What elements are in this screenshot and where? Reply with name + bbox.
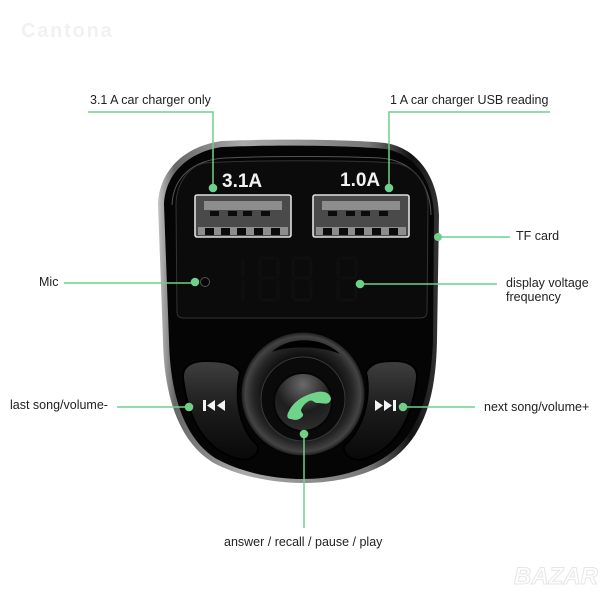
callout: 1 A car charger USB reading: 1 A car charger USB reading	[390, 93, 548, 107]
middle ring	[261, 357, 345, 441]
label: 1.0A: 1.0A	[340, 170, 380, 191]
outer ring	[241, 332, 365, 456]
phone icon	[287, 392, 331, 420]
display panel	[176, 161, 428, 318]
callout: display voltage frequency: frequency	[506, 290, 562, 304]
callout: 3.1 A car charger only: 3.1 A car charger only	[90, 93, 212, 107]
mic hole	[200, 278, 210, 286]
right button	[344, 361, 417, 460]
watermark: Bazar: BAZAR	[514, 563, 599, 590]
callout: TF card: TF card	[516, 229, 559, 243]
callout: 3.1 A car charger only	[88, 93, 217, 192]
next icon	[375, 400, 396, 411]
bezel highlight	[172, 156, 431, 215]
callout: Mic: Mic	[39, 275, 58, 289]
callout: answer / recall / pause / play	[224, 430, 383, 549]
callout: 1 A car charger USB reading	[385, 93, 550, 192]
USB port left	[195, 195, 291, 237]
callout: Mic	[39, 275, 199, 289]
callout: answer / recall / pause / play: answer / recall / pause / play	[224, 535, 383, 549]
USB port right	[313, 195, 409, 237]
left button	[183, 361, 258, 460]
center cap	[274, 373, 332, 431]
knob	[241, 332, 365, 456]
callout: display voltage frequency: display voltage	[506, 276, 589, 290]
callout: next song/volume+: next song/volume+	[484, 400, 589, 414]
seven-segment display digits	[243, 258, 356, 300]
callout: last song/volume-	[10, 398, 193, 412]
previous icon	[203, 400, 225, 411]
label: 3.1A: 3.1A	[222, 171, 262, 192]
callout: display voltage frequency	[356, 276, 589, 304]
callout: last song/volume-: last song/volume-	[10, 398, 108, 412]
car charger device	[158, 140, 439, 483]
watermark: Cantona: Cantona	[21, 20, 114, 42]
callout: TF card	[434, 229, 559, 243]
callout: next song/volume+	[399, 400, 589, 414]
charger body	[158, 140, 439, 483]
